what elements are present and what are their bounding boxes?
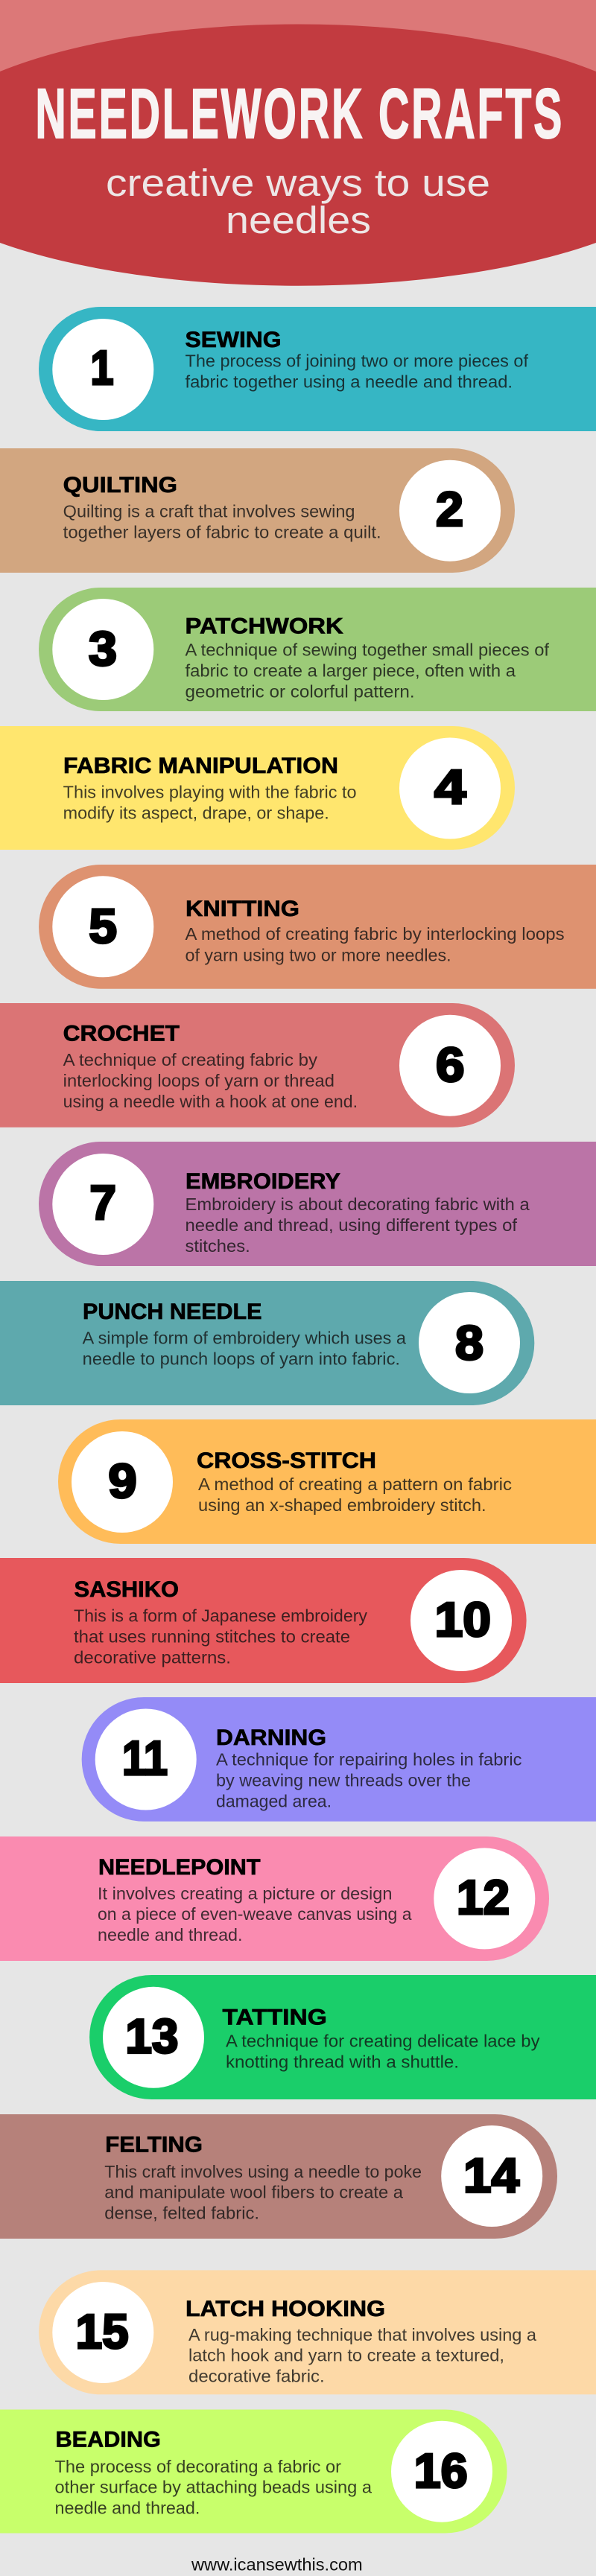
text: felting description: dense, felted fabric. — [104, 2203, 259, 2222]
heading: needlepoint: NEEDLEPOINT — [98, 1855, 261, 1880]
text: cross-stitch description: A method of creating a pattern on fabric — [198, 1475, 512, 1494]
text: crochet description — [63, 1050, 358, 1111]
badge 9 — [72, 1431, 173, 1533]
panel: 6 crochet — [0, 1003, 515, 1128]
badge 10: 10 — [435, 1592, 491, 1647]
badge 2 — [399, 460, 501, 562]
text: darning description — [216, 1749, 522, 1810]
heading: sewing: SEWING — [185, 328, 282, 352]
panel: 7 embroidery — [39, 1142, 596, 1266]
badge 14 — [441, 2125, 542, 2227]
badge 16 — [391, 2421, 492, 2522]
heading: darning: DARNING — [216, 1726, 326, 1750]
text: quilting description: Quilting is a craft that involves sewing — [63, 502, 355, 521]
badge 15: 15 — [76, 2304, 129, 2359]
text: punch needle description — [83, 1329, 406, 1369]
text: needlepoint description: on a piece of even-weave canvas using a — [98, 1904, 412, 1924]
text: punch needle description: A simple form of embroidery which uses a — [83, 1329, 406, 1348]
badge 5: 5 — [89, 899, 117, 953]
text: knitting description: of yarn using two or more needles. — [185, 945, 451, 964]
text: patchwork description — [185, 640, 550, 701]
badge 1 — [52, 319, 153, 420]
text: latch hooking description — [188, 2325, 536, 2386]
text: quilting description: together layers of fabric to create a quilt. — [63, 523, 381, 542]
badge 11: 11 — [122, 1731, 168, 1785]
badge 12: 12 — [457, 1870, 510, 1924]
text: patchwork description: fabric to create a larger piece, often with a — [185, 661, 516, 681]
badge 4: 4 — [434, 760, 466, 814]
text: latch hooking description: latch hook and yarn to create a textured, — [188, 2346, 504, 2365]
heading: fabric manipulation: FABRIC MANIPULATION — [63, 754, 338, 778]
badge 7 — [52, 1154, 153, 1255]
heading: tatting: TATTING — [222, 2006, 327, 2030]
badge 8 — [419, 1292, 520, 1393]
text: sewing description: fabric together using a needle and thread. — [185, 372, 513, 392]
badge 3 — [52, 599, 153, 700]
badge 14: 14 — [463, 2148, 519, 2202]
text: sewing description — [185, 352, 529, 392]
text: beading description: needle and thread. — [55, 2498, 200, 2517]
text: tatting description — [226, 2032, 540, 2071]
heading: embroidery: EMBROIDERY — [186, 1169, 340, 1194]
text: embroidery description: needle and thread, using different types of — [185, 1215, 518, 1235]
panel: 14 felting — [0, 2114, 557, 2239]
panel: 4 fabric manipulation — [0, 726, 515, 850]
badge 16: 16 — [414, 2443, 468, 2498]
panel: 12 needlepoint — [0, 1836, 549, 1961]
text: knitting description — [185, 924, 565, 964]
badge 6: 6 — [436, 1037, 465, 1092]
subtitle: creative ways to use — [106, 162, 490, 204]
text: fabric manipulation description: This involves playing with the fabric to — [63, 782, 357, 801]
badge 8: 8 — [455, 1315, 484, 1370]
badge 10 — [410, 1570, 512, 1671]
text: needlepoint description — [98, 1883, 412, 1944]
heading: knitting: KNITTING — [186, 897, 299, 921]
badge 13: 13 — [125, 2009, 178, 2063]
text: patchwork description: geometric or colorful pattern. — [185, 681, 415, 701]
panel: 10 sashiko — [0, 1558, 527, 1683]
badge 1: 1 — [91, 340, 113, 395]
badge 15 — [52, 2282, 153, 2383]
heading: beading: BEADING — [55, 2428, 161, 2452]
badge 12 — [434, 1848, 535, 1949]
badge 4 — [399, 737, 501, 839]
panel: 15 latch hooking — [39, 2270, 596, 2394]
badge 6 — [399, 1015, 501, 1116]
text: cross-stitch description — [198, 1475, 512, 1515]
text: punch needle description: needle to punch loops of yarn into fabric. — [83, 1349, 400, 1369]
panel: 11 darning — [82, 1697, 596, 1822]
badge 2: 2 — [436, 482, 463, 536]
badge 13 — [103, 1987, 204, 2088]
heading: crochet: CROCHET — [63, 1022, 180, 1046]
text: crochet description: interlocking loops of yarn or thread — [63, 1071, 335, 1090]
text: darning description: A technique for repairing holes in fabric — [216, 1749, 522, 1769]
text: beading description: other surface by attaching beads using a — [55, 2478, 372, 2497]
text: darning description: damaged area. — [216, 1791, 332, 1810]
text: darning description: by weaving new threads over the — [216, 1771, 471, 1790]
text: crochet description: A technique of creating fabric by — [63, 1050, 318, 1069]
text: patchwork description: A technique of sewing together small pieces of — [185, 640, 550, 660]
text: needlepoint description: It involves creating a picture or design — [98, 1883, 392, 1903]
panel: 8 punch needle — [0, 1281, 534, 1405]
header banner — [0, 0, 596, 286]
text: sashiko description — [74, 1606, 368, 1667]
text: felting description: This craft involves using a needle to poke — [104, 2162, 422, 2181]
heading: cross-stitch: CROSS-STITCH — [197, 1448, 376, 1473]
text: crochet description: using a needle with a hook at one end. — [63, 1092, 358, 1111]
text: beading description: The process of decorating a fabric or — [55, 2457, 341, 2476]
panel: 5 knitting — [39, 865, 596, 989]
panel: 2 quilting — [0, 448, 515, 573]
text: felting description — [104, 2162, 422, 2222]
text: latch hooking description: decorative fabric. — [188, 2367, 325, 2386]
subtitle: needles — [226, 199, 371, 241]
badge 3: 3 — [89, 622, 117, 676]
panel: 3 patchwork — [39, 588, 596, 711]
heading: latch hooking: LATCH HOOKING — [186, 2297, 385, 2321]
text: sashiko description: decorative patterns. — [74, 1648, 231, 1667]
text: fabric manipulation description — [63, 782, 357, 822]
text: sashiko description: This is a form of Japanese embroidery — [74, 1606, 368, 1625]
badge 5 — [52, 876, 153, 977]
text: knitting description: A method of creating fabric by interlocking loops — [185, 924, 565, 944]
text: embroidery description — [185, 1195, 530, 1256]
text: tatting description: A technique for creating delicate lace by — [226, 2032, 540, 2051]
panel: 9 cross-stitch — [58, 1419, 596, 1544]
text: sashiko description: that uses running stitches to create — [74, 1627, 350, 1647]
title: NEEDLEWORK CRAFTS — [36, 74, 562, 153]
text: embroidery description: stitches. — [185, 1236, 250, 1256]
heading: felting: FELTING — [105, 2133, 203, 2157]
badge 11 — [95, 1708, 197, 1810]
panel: 1 sewing — [39, 307, 596, 431]
badge 7: 7 — [89, 1175, 116, 1230]
text: sewing description: The process of joining two or more pieces of — [185, 352, 529, 371]
text: embroidery description: Embroidery is about decorating fabric with a — [185, 1195, 530, 1214]
text: felting description: and manipulate wool fibers to create a — [104, 2183, 403, 2202]
heading: quilting: QUILTING — [63, 473, 177, 497]
heading: punch needle: PUNCH NEEDLE — [83, 1300, 262, 1324]
text: latch hooking description: A rug-making technique that involves using a — [188, 2325, 536, 2344]
text: tatting description: knotting thread with a shuttle. — [226, 2052, 459, 2071]
panel: 13 tatting — [89, 1975, 596, 2099]
text: beading description — [55, 2457, 372, 2517]
heading: sashiko: SASHIKO — [74, 1577, 179, 1602]
heading: patchwork: PATCHWORK — [185, 614, 343, 639]
text: fabric manipulation description: modify its aspect, drape, or shape. — [63, 803, 329, 822]
text: cross-stitch description: using an x-shaped embroidery stitch. — [198, 1495, 486, 1515]
panel: 16 beading — [0, 2410, 507, 2534]
text: quilting description — [63, 502, 381, 542]
text: needlepoint description: needle and thread. — [98, 1925, 243, 1944]
badge 9: 9 — [108, 1454, 137, 1508]
subtitle — [106, 162, 490, 241]
footer url: www.icansewthis.com — [191, 2554, 363, 2574]
